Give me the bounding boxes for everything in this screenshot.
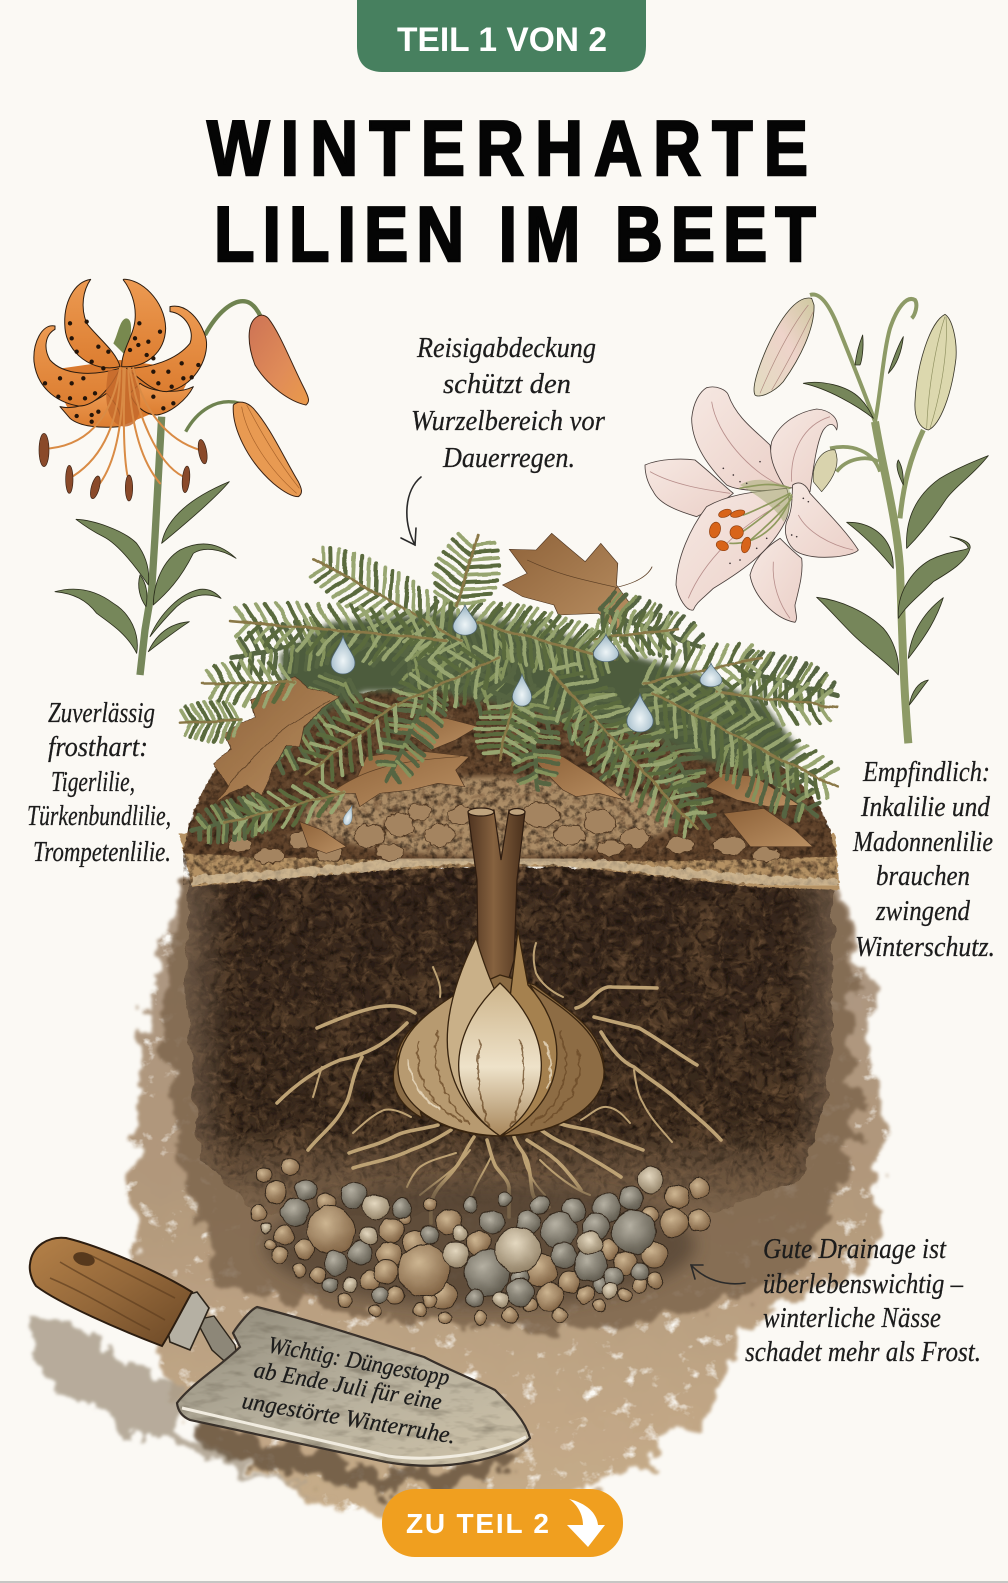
callout: reisig cover: Dauerregen. <box>442 442 575 474</box>
watercolor wash around soil <box>90 880 920 1540</box>
dark humus mound <box>183 686 835 861</box>
pine branches covering the bed <box>179 526 851 850</box>
title <box>207 105 816 278</box>
lily bulb <box>393 930 604 1136</box>
trowel note: Wichtig: Düngestopp <box>266 1332 452 1391</box>
garden trowel <box>28 1238 535 1500</box>
callout: frost hardy lilies: Tigerlilie, <box>51 766 135 798</box>
callout: reisig cover: schützt den <box>443 368 571 400</box>
callout: drainage: Gute Drainage ist <box>763 1233 947 1265</box>
icon: down arrow <box>567 1499 605 1547</box>
callout: sensitive lilies: Winterschutz. <box>855 931 995 963</box>
button: to part 2: ZU TEIL 2 <box>406 1508 549 1539</box>
lily stem with forked cut <box>468 808 525 992</box>
callout: reisig cover: Reisigabdeckung <box>416 332 596 364</box>
trowel note <box>240 1332 457 1450</box>
button: to part 2 <box>382 1489 623 1557</box>
arrow: to drainage <box>691 1265 745 1284</box>
callout: frost hardy lilies: Zuverlässig <box>48 697 155 729</box>
madonna / pale lily illustration <box>645 294 988 743</box>
callout: sensitive lilies: zwingend <box>875 895 970 927</box>
callout: reisig cover <box>411 332 606 474</box>
callout: frost hardy lilies: Türkenbundlilie, <box>27 800 171 832</box>
drainage gravel <box>251 1158 710 1325</box>
callout: sensitive lilies <box>852 756 995 963</box>
callout: frost hardy lilies: Trompetenlilie. <box>33 836 171 868</box>
callout: drainage <box>745 1233 981 1368</box>
trowel blade <box>177 1307 530 1466</box>
trowel note: ab Ende Juli für eine <box>252 1357 444 1416</box>
callout: drainage: überlebenswichtig – <box>763 1268 963 1300</box>
roots <box>277 943 721 1223</box>
dry leaves <box>299 533 813 853</box>
arrow: to reisig cover <box>401 477 421 545</box>
tiger lily illustration <box>34 279 309 675</box>
topsoil band and leaf-litter mound <box>170 533 850 890</box>
header tab: part 1 of 2: TEIL 1 VON 2 <box>397 21 607 59</box>
trowel shadow <box>28 1318 525 1500</box>
title: LILIEN IM BEET <box>214 191 816 278</box>
big dry leaf on the left flank <box>212 677 340 805</box>
callout: reisig cover: Wurzelbereich vor <box>411 405 606 437</box>
title: WINTERHARTE <box>207 105 808 192</box>
trowel neck and ferrule <box>196 1316 240 1375</box>
dark soil layer <box>170 860 850 1230</box>
earth mottling <box>183 688 838 885</box>
header tab: part 1 of 2 <box>357 0 646 72</box>
clods of earth <box>228 803 779 864</box>
trowel handle <box>30 1238 192 1346</box>
light topsoil band <box>179 833 840 890</box>
callout: frost hardy lilies <box>27 697 171 868</box>
callout: drainage: winterliche Nässe <box>763 1302 941 1334</box>
water drops <box>331 605 722 826</box>
callout: sensitive lilies: Inkalilie und <box>860 791 990 823</box>
callout: frost hardy lilies: frosthart: <box>48 731 148 763</box>
callout: sensitive lilies: brauchen <box>876 860 970 892</box>
trowel note: ungestörte Winterruhe. <box>240 1388 457 1450</box>
soil cross-section <box>123 866 892 1520</box>
pale band edge <box>192 860 838 884</box>
